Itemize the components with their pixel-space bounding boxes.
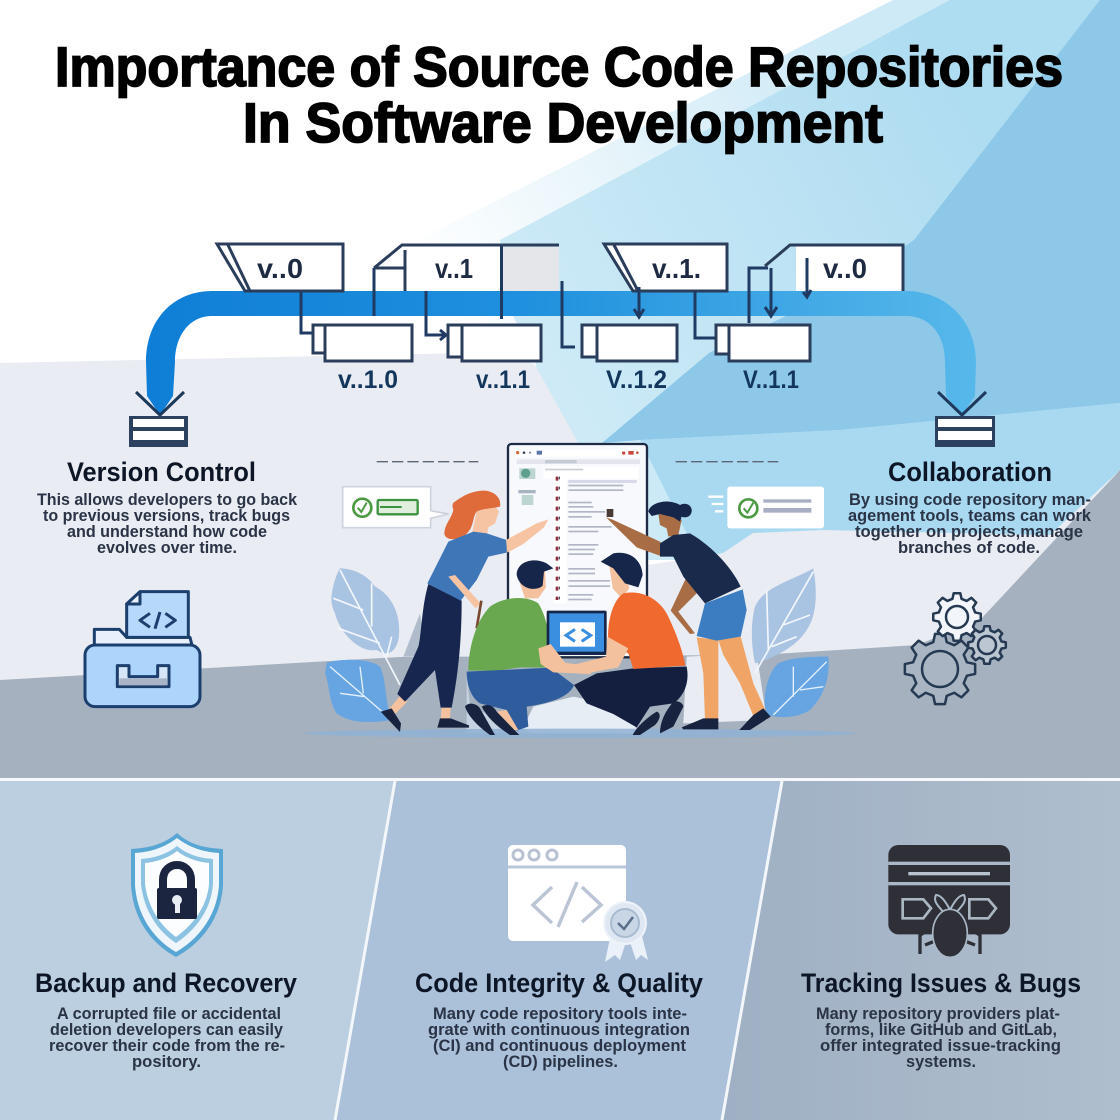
dashed lines [377, 460, 778, 464]
document v..0 right: v..0 [823, 253, 867, 284]
panel dividers [335, 781, 782, 1120]
document v..1.: v..1. [652, 253, 701, 284]
text: collaboration: together on projects,manage [855, 523, 1083, 541]
text: version control: and understand how code [67, 523, 267, 541]
text: collaboration [848, 491, 1092, 557]
big screen [508, 444, 647, 657]
text: code integrity and quality: Many code repository tools inte- [433, 1005, 687, 1023]
leaves right [752, 568, 829, 717]
version box v..1.0 [313, 325, 412, 361]
text: tracking issues and bugs: systems. [906, 1053, 976, 1071]
heading: backup and recovery: Backup and Recovery [35, 968, 297, 998]
text: code integrity and quality: (CI) and continuous deployment [433, 1037, 687, 1055]
heading: code integrity and quality: Code Integrity & Quality [415, 968, 703, 998]
document v..0 right [765, 245, 903, 291]
heading: tracking issues and bugs: Tracking Issues & Bugs [801, 968, 1081, 998]
panel: backup and recovery [0, 781, 395, 1120]
document v..0: v..0 [257, 253, 303, 284]
heading: version control: Version Control [67, 457, 256, 487]
text: backup and recovery [49, 1005, 285, 1071]
text: code integrity and quality: grate with continuous integration [428, 1021, 690, 1039]
version box v..1.2 [582, 325, 677, 361]
text: backup and recovery: recover their code from the re- [49, 1037, 285, 1055]
person: woman left [381, 491, 548, 732]
text: version control [37, 491, 298, 557]
version documents and connectors [217, 244, 903, 361]
version box v..1.1 right [716, 325, 810, 361]
leaves left [325, 568, 400, 722]
arrow head left [136, 392, 184, 415]
person: orange shirt man [538, 553, 688, 735]
document v..0 [217, 244, 343, 291]
text: collaboration: By using code repository man- [849, 491, 1091, 509]
text: collaboration: agement tools, teams can work [848, 507, 1092, 525]
text: code integrity and quality: (CD) pipelines. [503, 1053, 618, 1071]
document v..1 [374, 245, 559, 291]
icon: gears [905, 593, 1006, 704]
panel: code integrity and quality [335, 781, 782, 1120]
text: code integrity and quality [428, 1005, 690, 1071]
version labels: V..1.2 [606, 366, 667, 394]
illustration: team around code screen [303, 444, 857, 738]
version labels: V..1.1 [743, 366, 799, 394]
padlock [157, 865, 197, 919]
title [55, 35, 1063, 154]
callout right [708, 487, 824, 528]
icon: right tray [935, 416, 995, 447]
icon: shield with padlock [131, 833, 223, 957]
connectors [301, 246, 811, 347]
text: collaboration: branches of code. [898, 539, 1040, 557]
callout left [343, 487, 448, 528]
arrow head right [938, 392, 986, 415]
text: backup and recovery: deletion developers can easily [50, 1021, 284, 1039]
document v..1: v..1 [435, 253, 473, 284]
text: version control: This allows developers to go back [37, 491, 298, 509]
version labels [338, 366, 799, 394]
text: tracking issues and bugs: Many repository providers plat- [816, 1005, 1060, 1023]
heading: collaboration: Collaboration [888, 457, 1052, 487]
text: version control: to previous versions, track bugs [43, 507, 290, 525]
title: In Software Development [243, 91, 883, 154]
text: backup and recovery: A corrupted file or accidental [57, 1005, 281, 1023]
document v..1. [604, 244, 727, 291]
small gear [968, 626, 1006, 664]
laptop [547, 611, 607, 655]
ground pale areas [520, 697, 640, 733]
version labels: v..1.0 [338, 366, 398, 394]
title: Importance of Source Code Repositories [55, 35, 1063, 98]
text: tracking issues and bugs [816, 1005, 1061, 1071]
top gear [933, 593, 981, 641]
person: green shirt man [465, 560, 574, 735]
icon: code window with badge [508, 845, 648, 962]
panel: tracking issues and bugs [722, 781, 1120, 1120]
text: version control: evolves over time. [97, 539, 237, 557]
quality badge [604, 902, 648, 962]
version box v..1.1 [448, 325, 541, 361]
divider [0, 778, 1120, 781]
version flow arrow [146, 291, 976, 415]
icon: left tray [129, 416, 188, 447]
text: tracking issues and bugs: offer integrated issue-tracking [820, 1037, 1061, 1055]
icon: bug on code window [888, 845, 1010, 957]
large gear [905, 634, 975, 704]
version labels: v..1.1 [476, 366, 530, 394]
icon: code folder [85, 592, 200, 707]
text: tracking issues and bugs: forms, like GitHub and GitLab, [825, 1021, 1057, 1039]
person: woman right [606, 501, 771, 730]
text: backup and recovery: pository. [132, 1053, 201, 1071]
